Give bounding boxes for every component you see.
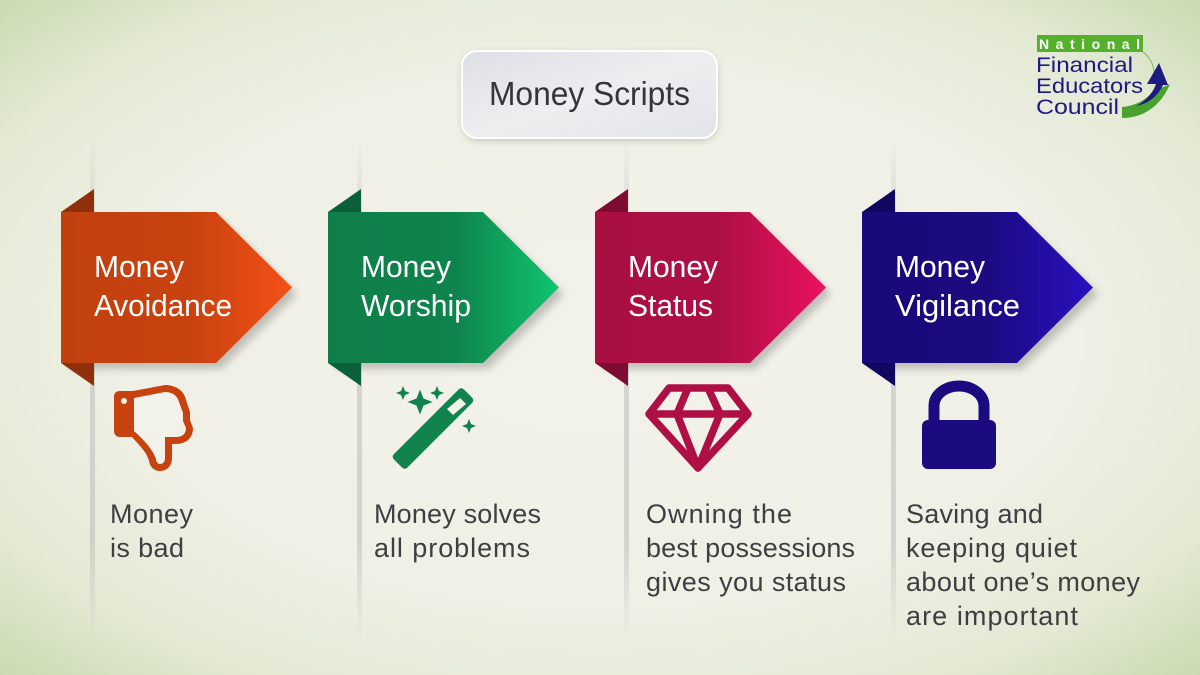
heading: Money <box>895 249 985 284</box>
ribbon arrow <box>61 189 297 386</box>
description: gives you status <box>646 567 846 597</box>
logo <box>1036 35 1170 119</box>
heading: Worship <box>361 288 471 323</box>
ribbon arrow <box>328 189 564 386</box>
description: is bad <box>110 533 184 563</box>
ribbon arrow <box>595 189 831 386</box>
heading <box>628 249 718 323</box>
logo: National <box>1039 36 1140 52</box>
ribbon arrow <box>862 189 1098 386</box>
description: Money solves <box>374 499 541 529</box>
icon: magic wand <box>391 386 476 470</box>
logo: swoosh <box>1122 84 1170 118</box>
logo: National banner <box>1037 35 1143 52</box>
column divider lines <box>90 140 896 640</box>
heading: Money <box>361 249 451 284</box>
logo: wordmark: Financial <box>1036 54 1133 77</box>
heading: Money <box>628 249 718 284</box>
logo: Council <box>1036 96 1119 119</box>
description: keeping quiet <box>906 533 1077 563</box>
heading <box>361 249 471 323</box>
description: Money <box>110 499 194 529</box>
heading: Vigilance <box>895 288 1020 323</box>
logo: thin arc <box>1143 52 1154 78</box>
description: are important <box>906 601 1078 631</box>
description: best possessions <box>646 533 855 563</box>
panel: Money Avoidance <box>61 189 297 563</box>
description <box>374 499 541 563</box>
title box <box>462 51 717 140</box>
heading: Avoidance <box>94 288 232 323</box>
logo: Educators <box>1036 75 1143 98</box>
description: Saving and <box>906 499 1043 529</box>
heading <box>895 249 1020 323</box>
description: Owning the <box>646 499 792 529</box>
description: all problems <box>374 533 530 563</box>
description: about one’s money <box>906 567 1140 597</box>
heading: Money <box>94 249 184 284</box>
description <box>110 499 194 563</box>
description <box>906 499 1140 631</box>
heading: Status <box>628 288 713 323</box>
title text: Money Scripts <box>489 75 690 112</box>
description <box>646 499 855 597</box>
icon: diamond <box>649 388 748 468</box>
icon: padlock <box>922 386 996 469</box>
panel: Money Vigilance <box>862 189 1140 631</box>
icon: thumbs down <box>114 385 193 471</box>
heading <box>94 249 232 323</box>
panel: Money Worship <box>328 189 564 563</box>
panel: Money Status <box>595 189 855 597</box>
logo: arrow <box>1136 63 1168 106</box>
